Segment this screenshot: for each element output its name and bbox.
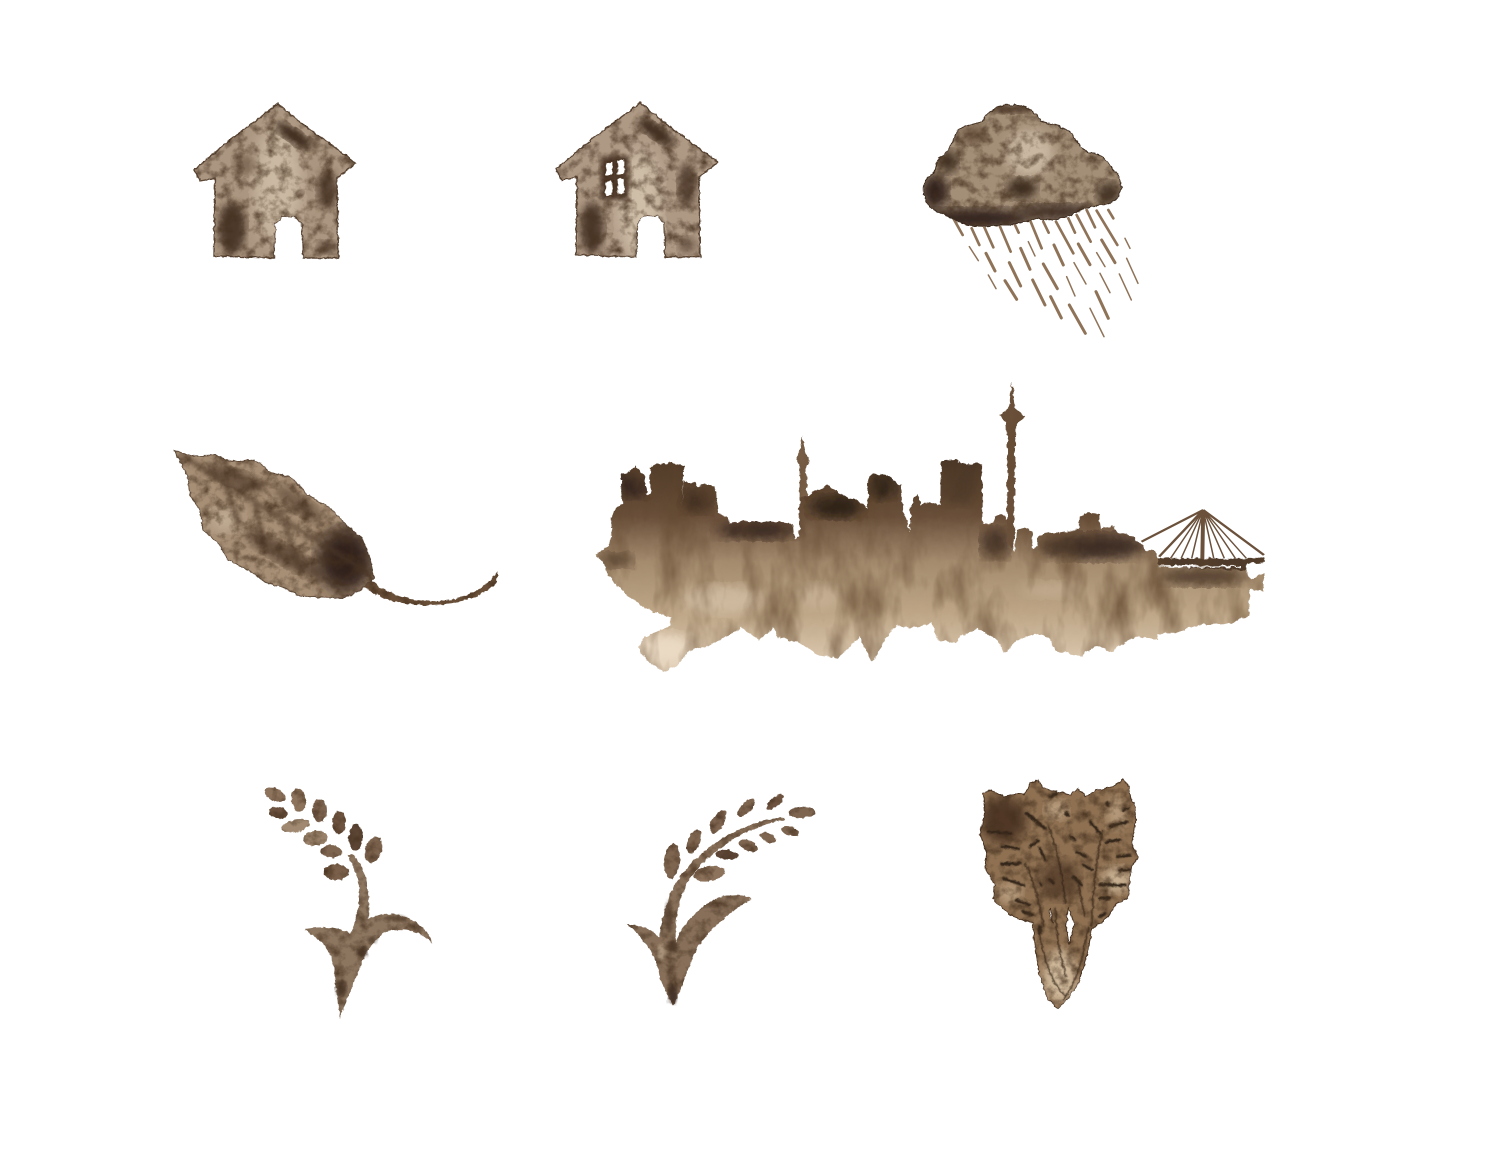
icon: upright wheat plant	[262, 785, 432, 1018]
icon: rain cloud	[917, 105, 1138, 337]
icon: plain house	[194, 104, 356, 258]
grains	[663, 792, 816, 884]
icon: city skyline	[595, 382, 1264, 672]
grains	[262, 785, 385, 880]
leaf veins	[988, 793, 1130, 1000]
icon: leaf	[174, 450, 498, 605]
icon: house with window	[556, 103, 718, 260]
stem and leaves	[304, 855, 432, 1018]
stem and leaves	[627, 817, 784, 1006]
bridge deck	[1156, 558, 1264, 570]
tower: tall right	[999, 382, 1025, 552]
cable-stayed bridge	[1142, 510, 1264, 560]
icon: leafy cabbage	[980, 778, 1138, 1008]
rain streaks	[953, 210, 1138, 337]
leaf stem	[364, 571, 498, 605]
icon: drooping rice plant	[627, 792, 816, 1006]
tower: short left	[795, 435, 809, 537]
